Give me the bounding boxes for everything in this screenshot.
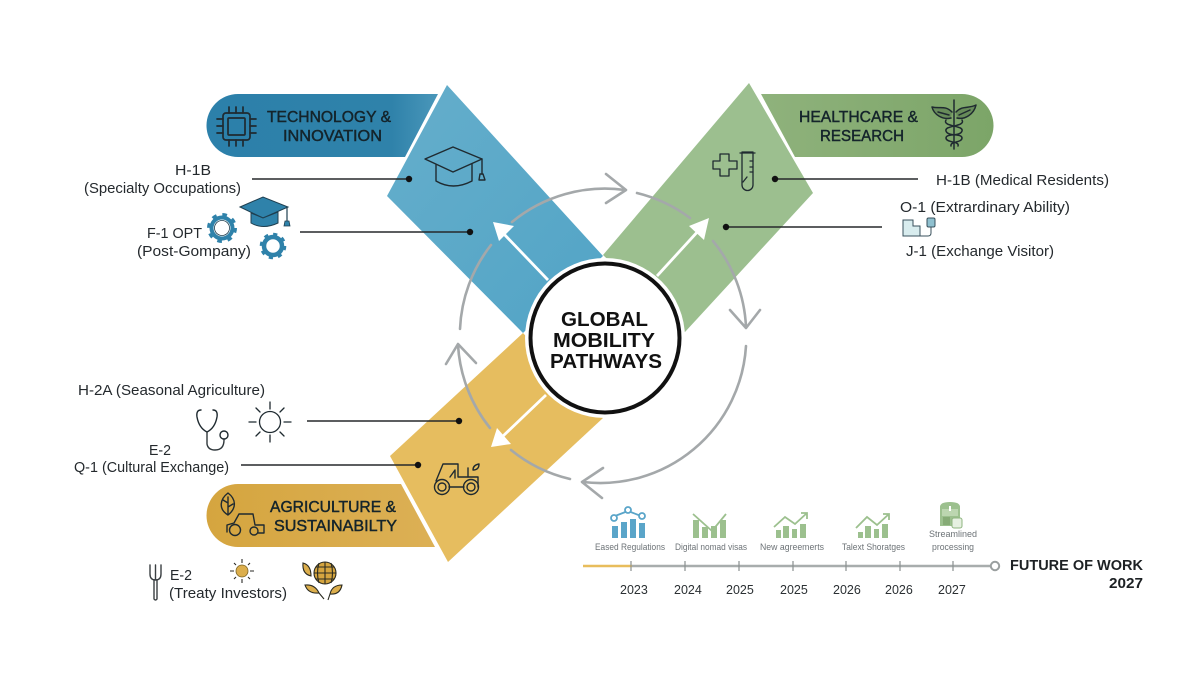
icon: leaf and truck bbox=[221, 493, 264, 536]
leader line: H-1B medical bbox=[772, 176, 918, 182]
icon: caduceus bbox=[932, 100, 976, 149]
label: future of work: FUTURE OF WORK bbox=[1010, 558, 1144, 574]
timeline captions: processing bbox=[932, 542, 974, 553]
timeline axis bbox=[583, 561, 999, 571]
icon: cross and test tube bbox=[713, 152, 755, 190]
heading: technology and innovation bbox=[267, 109, 391, 145]
icon: filled graduation cap bbox=[240, 197, 290, 226]
timeline bbox=[583, 502, 1144, 597]
heading: healthcare and research: RESEARCH bbox=[820, 128, 904, 145]
timeline years: 2026 bbox=[885, 583, 913, 597]
label: H-2A seasonal agriculture: H-2A (Seasonal Agriculture) bbox=[78, 382, 265, 399]
icon: secure backpack bbox=[940, 502, 962, 528]
icon: sun outline bbox=[249, 402, 291, 442]
panel: healthcare and research bbox=[603, 83, 1109, 332]
leader line: O-1 bbox=[723, 224, 882, 230]
label: H-1B specialty occupations: H-1B bbox=[175, 162, 211, 179]
panel: agriculture and sustainability bbox=[74, 333, 603, 602]
arrow: toward agriculture bbox=[491, 395, 546, 447]
timeline years: 2024 bbox=[674, 583, 702, 597]
arrow: toward technology bbox=[493, 222, 548, 280]
leader line: H-1B bbox=[252, 176, 412, 182]
icon: growth chart two bbox=[856, 514, 889, 538]
timeline captions: Talext Shoratges bbox=[842, 542, 905, 553]
icon: growth chart one bbox=[774, 513, 807, 538]
heading pill: technology bbox=[207, 94, 438, 157]
timeline years: 2027 bbox=[938, 583, 966, 597]
leader line: Q-1 bbox=[241, 462, 421, 468]
timeline years: 2025 bbox=[780, 583, 808, 597]
center hub bbox=[525, 258, 685, 418]
leader line: H-2A bbox=[307, 418, 462, 424]
icon: graduation cap outline bbox=[425, 147, 485, 186]
timeline captions: New agreemerts bbox=[760, 542, 824, 553]
icon: globe and leaves bbox=[303, 562, 342, 600]
leader line: F-1 OPT bbox=[300, 229, 473, 235]
icon: gear large bbox=[209, 215, 235, 241]
label: F-1 OPT: (Post-Gompany) bbox=[137, 243, 251, 260]
label: E-2 treaty investors: (Treaty Investors) bbox=[169, 585, 287, 602]
icon: stethoscope bbox=[197, 410, 228, 450]
title: GLOBAL bbox=[561, 309, 648, 331]
timeline years: 2025 bbox=[726, 583, 754, 597]
band: agriculture bbox=[390, 333, 603, 562]
label: H-1B specialty occupations bbox=[84, 162, 241, 197]
heading: agriculture and sustainability: SUSTAINABILTY bbox=[274, 518, 397, 535]
timeline captions: Eased Regulations bbox=[595, 542, 665, 553]
heading: healthcare and research: HEALTHCARE & bbox=[799, 109, 918, 126]
timeline years bbox=[620, 583, 966, 597]
label: H-1B medical residents: H-1B (Medical Residents) bbox=[936, 172, 1109, 189]
label: E-2 and Q-1 cultural exchange: E-2 bbox=[149, 442, 171, 459]
heading: technology and innovation: INNOVATION bbox=[283, 128, 382, 145]
label: future of work: 2027 bbox=[1109, 576, 1143, 592]
icon: fork bbox=[150, 565, 161, 600]
label: future of work bbox=[1010, 558, 1144, 592]
title: PATHWAYS bbox=[550, 351, 662, 373]
icon: microchip bbox=[217, 107, 256, 146]
label: E-2 and Q-1 cultural exchange: Q-1 (Cultural Exchange) bbox=[74, 459, 229, 476]
timeline captions: Digital nomad visas bbox=[675, 542, 747, 553]
heading: technology and innovation: TECHNOLOGY & bbox=[267, 109, 391, 126]
timeline captions: Streamlined bbox=[929, 529, 977, 540]
icon: small lab device bbox=[903, 218, 935, 236]
label: E-2 treaty investors: E-2 bbox=[170, 567, 192, 584]
timeline years: 2026 bbox=[833, 583, 861, 597]
label: J-1 exchange visitor: J-1 (Exchange Visitor) bbox=[906, 243, 1054, 260]
icon: gear small bbox=[262, 234, 284, 258]
heading: agriculture and sustainability: AGRICULTURE & bbox=[270, 499, 396, 516]
title: MOBILITY bbox=[553, 330, 656, 352]
panel: technology and innovation bbox=[84, 85, 603, 333]
heading: healthcare and research bbox=[799, 109, 918, 145]
label: F-1 OPT bbox=[137, 225, 251, 260]
icon: bars and network blue bbox=[611, 507, 645, 538]
label: O-1 extraordinary ability: O-1 (Extrardinary Ability) bbox=[900, 199, 1070, 216]
timeline years: 2023 bbox=[620, 583, 648, 597]
band: technology bbox=[387, 85, 603, 333]
heading pill: healthcare bbox=[761, 94, 994, 157]
label: E-2 and Q-1 cultural exchange bbox=[74, 442, 229, 476]
icon: bars and line green bbox=[693, 514, 726, 538]
timeline captions bbox=[595, 529, 977, 553]
arrow: toward healthcare bbox=[657, 218, 709, 276]
heading pill: agriculture bbox=[207, 484, 435, 547]
title bbox=[550, 309, 662, 373]
cycle ring with arrows bbox=[446, 174, 760, 498]
label: H-1B specialty occupations: (Specialty Occupations) bbox=[84, 180, 241, 197]
band: healthcare bbox=[603, 83, 813, 332]
icon: tractor bbox=[434, 464, 479, 494]
icon: small sun bbox=[230, 559, 254, 583]
heading: agriculture and sustainability bbox=[270, 499, 397, 535]
label: F-1 OPT: F-1 OPT bbox=[147, 225, 202, 242]
label: E-2 treaty investors bbox=[169, 567, 287, 602]
